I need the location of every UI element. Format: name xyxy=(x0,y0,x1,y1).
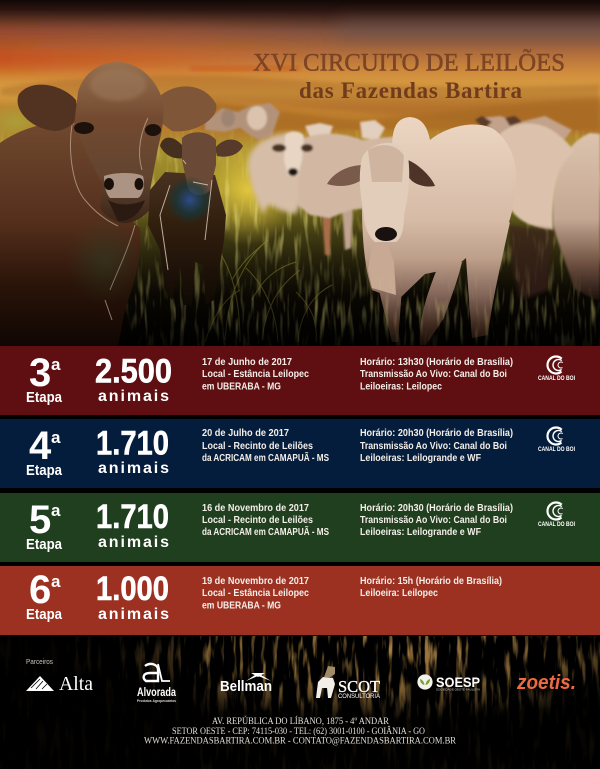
stage number: Etapa xyxy=(26,389,63,406)
logo: Canal do Boi xyxy=(538,353,575,382)
hero photo: sunset pasture with cattle xyxy=(0,0,600,346)
stage number: a xyxy=(51,355,61,374)
logo: Canal do Boi: CANAL DO BOI xyxy=(538,521,575,528)
schedule xyxy=(360,503,513,538)
logo: SOESP: SOCIEDADE OESTE PAULISTA xyxy=(436,688,480,692)
schedule: Transmissão Ao Vivo: Canal do Boi xyxy=(360,441,507,452)
logo: Zoetis: zoetis. xyxy=(516,672,576,694)
title line 1: XVI CIRCUITO DE LEILÕES xyxy=(253,48,565,76)
partners xyxy=(26,657,576,703)
animal count xyxy=(95,352,172,405)
schedule: Leiloeiras: Leilogrande e WF xyxy=(360,453,481,464)
zebu muzzle xyxy=(375,227,397,241)
band: 6a etapa xyxy=(0,566,600,635)
stage number: Etapa xyxy=(26,462,63,479)
date and venue: da ACRICAM em CAMAPUÃ - MS xyxy=(202,451,329,464)
date and venue: Local - Estância Leilopec xyxy=(202,369,309,380)
calf body xyxy=(148,172,226,305)
schedule: Horário: 20h30 (Horário de Brasília) xyxy=(360,503,513,514)
right cow xyxy=(497,123,574,230)
brown cow highlights xyxy=(71,118,148,320)
address: WWW.FAZENDASBARTIRA.COM.BR - CONTATO@FAZENDASBARTIRA.COM.BR xyxy=(144,736,457,746)
schedule: Leiloeiras: Leilopec xyxy=(360,382,442,392)
schedule: Leiloeira: Leilopec xyxy=(360,588,438,599)
logo: Canal do Boi xyxy=(538,499,575,528)
back white cows xyxy=(248,120,600,300)
zebu forehead shading xyxy=(368,145,404,182)
stage number: a xyxy=(51,501,61,520)
second cow body xyxy=(298,134,400,218)
date and venue xyxy=(202,503,329,538)
brown cow forehead fur xyxy=(90,69,146,101)
band: 3a etapa xyxy=(0,346,600,415)
distant hills xyxy=(0,76,600,135)
date and venue: da ACRICAM em CAMAPUÃ - MS xyxy=(202,525,329,538)
logo: Alta xyxy=(26,673,93,695)
stage number xyxy=(26,351,63,406)
address: AV. REPÚBLICA DO LÍBANO, 1875 - 4º ANDAR xyxy=(212,715,390,727)
zebu second front leg xyxy=(420,262,462,345)
grass texture xyxy=(0,130,600,346)
schedule xyxy=(360,357,513,392)
title xyxy=(253,48,565,103)
stage number: 3 xyxy=(29,351,51,395)
calf highlights xyxy=(160,160,212,270)
animal count: animais xyxy=(98,606,169,623)
sunset clouds xyxy=(0,22,600,71)
logo: Canal do Boi xyxy=(538,424,575,453)
date and venue: Local - Estância Leilopec xyxy=(202,588,309,599)
animal count: animais xyxy=(98,460,169,477)
foreground grass over legs xyxy=(130,270,600,346)
logo: Canal do Boi: CANAL DO BOI xyxy=(538,375,575,382)
footer: grass background xyxy=(0,636,600,769)
stage number: 4 xyxy=(29,424,52,468)
date and venue: 20 de Julho de 2017 xyxy=(202,428,289,439)
animal count: 2.500 xyxy=(95,352,172,390)
logo: Alvorada xyxy=(137,664,176,703)
schedule xyxy=(360,428,513,464)
stage number: 5 xyxy=(29,498,51,542)
band: 5a etapa xyxy=(0,493,600,562)
date and venue: 19 de Novembro de 2017 xyxy=(202,576,309,587)
far-left green pasture xyxy=(0,98,55,146)
brown cow eyes xyxy=(74,122,94,134)
logo: Bellman: Bellman xyxy=(220,678,272,695)
cow behind heads xyxy=(305,123,333,142)
logo: SOESP xyxy=(417,674,480,692)
schedule: Horário: 20h30 (Horário de Brasília) xyxy=(360,428,513,439)
animal count: 1.710 xyxy=(96,424,169,462)
brown cow body xyxy=(0,123,141,346)
stage number xyxy=(26,568,63,623)
main zebu cow xyxy=(327,117,516,345)
band: 4a etapa xyxy=(0,419,600,488)
calf head xyxy=(182,132,216,195)
animal count xyxy=(96,570,169,623)
animal count: 1.000 xyxy=(96,570,169,608)
zebu front leg xyxy=(378,285,402,342)
logo: SCOT Consultoria: CONSULTORIA xyxy=(338,693,381,700)
schedule: Transmissão Ao Vivo: Canal do Boi xyxy=(360,369,507,380)
stage number: Etapa xyxy=(26,606,63,623)
schedule: Leiloeiras: Leilogrande e WF xyxy=(360,527,481,538)
logo: Alvorada: Produtos Agropecuários xyxy=(137,699,176,703)
logo: SCOT Consultoria xyxy=(316,666,381,700)
brown cow muzzle xyxy=(104,173,144,198)
zebu ears xyxy=(327,165,364,186)
sky and field gradient xyxy=(0,0,600,346)
logo: SCOT Consultoria: SCOT xyxy=(338,677,381,696)
ground darkening xyxy=(0,240,600,346)
animal count: animais xyxy=(98,534,169,551)
calf ears xyxy=(160,138,184,158)
partners label: Parceiros xyxy=(26,657,53,666)
brown calf xyxy=(148,132,243,305)
logo: Canal do Boi: CANAL DO BOI xyxy=(538,446,575,453)
address: SETOR OESTE - CEP: 74115-030 - TEL: (62) 3001-0100 - GOIÂNIA - GO xyxy=(172,725,425,737)
date and venue: Local - Recinto de Leilões xyxy=(202,441,313,452)
brown cow ears xyxy=(18,85,78,131)
date and venue: Local - Recinto de Leilões xyxy=(202,515,313,526)
distant herd xyxy=(205,103,572,145)
far right cow xyxy=(553,133,600,300)
zebu body xyxy=(362,117,516,300)
animal count: animais xyxy=(98,388,169,405)
address xyxy=(144,715,457,746)
date and venue: em UBERABA - MG xyxy=(202,382,281,392)
date and venue: 17 de Junho de 2017 xyxy=(202,357,292,368)
stage number: a xyxy=(51,572,61,591)
date and venue xyxy=(202,357,309,392)
date and venue xyxy=(202,576,309,612)
zebu dewlap xyxy=(368,245,396,295)
animal count xyxy=(96,498,169,551)
sunlit grass glow xyxy=(193,135,303,245)
date and venue: em UBERABA - MG xyxy=(202,600,281,612)
title line 2: das Fazendas Bartira xyxy=(299,78,522,103)
logo: Alta: Alta xyxy=(59,673,93,695)
date and venue xyxy=(202,428,329,464)
stage number xyxy=(26,498,63,553)
schedule: Horário: 13h30 (Horário de Brasília) xyxy=(360,357,513,368)
brown cow head xyxy=(74,62,163,223)
schedule: Transmissão Ao Vivo: Canal do Boi xyxy=(360,515,507,526)
stage number: a xyxy=(51,428,61,447)
animal count: 1.710 xyxy=(96,498,169,536)
date and venue: 16 de Novembro de 2017 xyxy=(202,503,309,514)
blurred cow behind xyxy=(248,133,305,215)
schedule xyxy=(360,576,502,599)
stage number: 6 xyxy=(29,568,51,612)
schedule: Horário: 15h (Horário de Brasília) xyxy=(360,576,502,587)
right cow shadowed legs xyxy=(508,225,553,300)
stage number xyxy=(26,424,63,479)
animal count xyxy=(96,424,169,477)
green lens flare xyxy=(67,215,143,305)
calf lens flare xyxy=(166,176,214,224)
brown cow xyxy=(0,62,216,346)
logo: SOESP: SOESP xyxy=(436,674,480,690)
grass blades xyxy=(205,240,332,342)
zebu rear leg xyxy=(465,222,510,338)
zebu head xyxy=(360,143,409,242)
second cow head xyxy=(284,131,304,176)
stage number: Etapa xyxy=(26,536,63,553)
logo: Alvorada: Alvorada xyxy=(137,685,176,699)
second cow legs xyxy=(322,212,331,255)
